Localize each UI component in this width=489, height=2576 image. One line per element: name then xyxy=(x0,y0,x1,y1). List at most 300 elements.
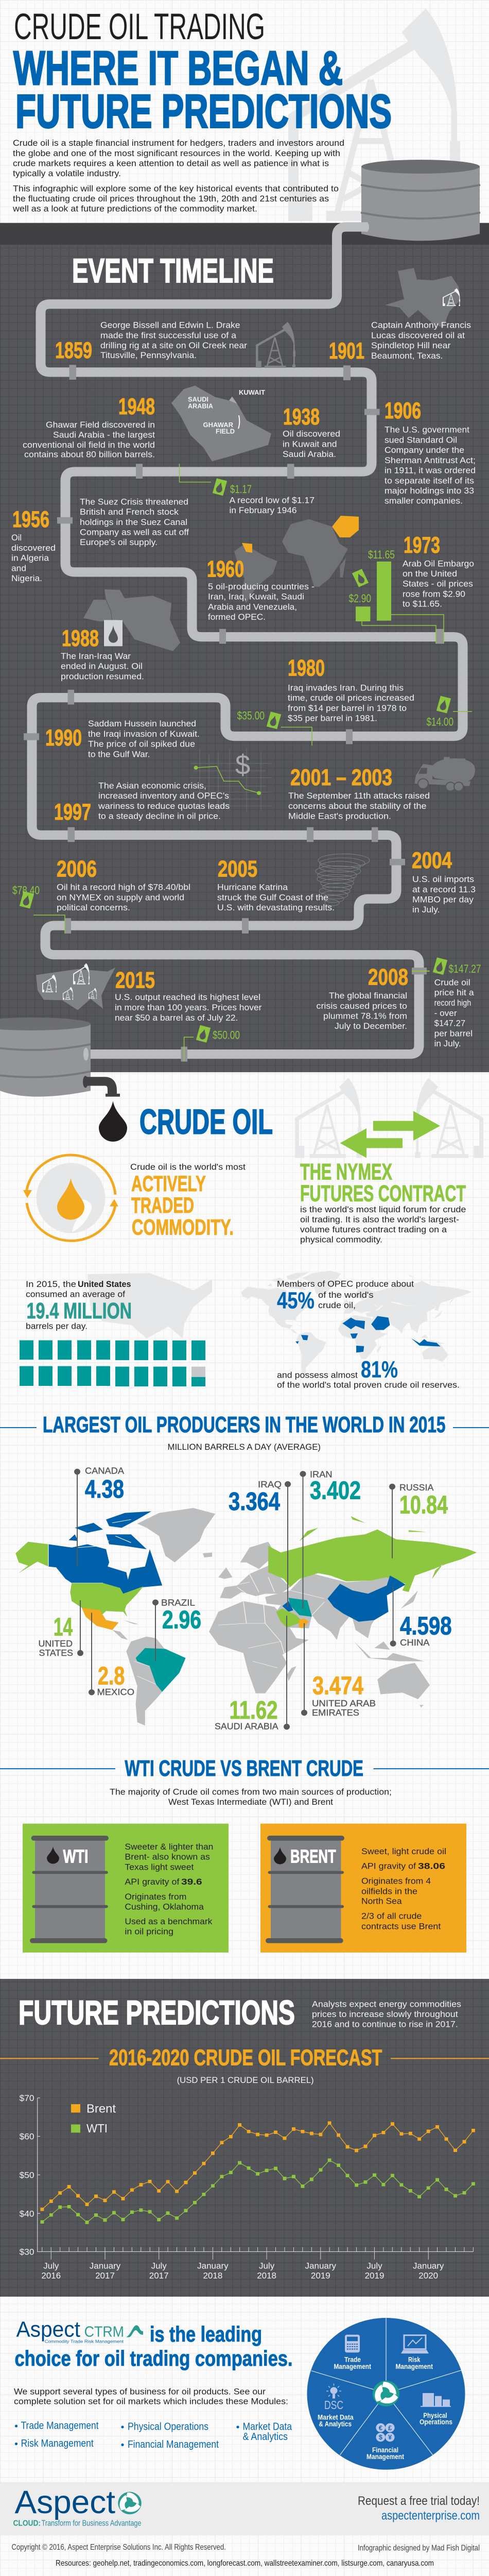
map: saudi arabia and kuwait xyxy=(171,386,271,461)
heading: leading choice: is the leading xyxy=(150,2323,262,2346)
event: 1906: in 1911, it was ordered xyxy=(385,466,476,476)
country: china xyxy=(327,1575,406,1622)
label: iran: IRAN xyxy=(310,1469,332,1479)
x-axis labels: January xyxy=(413,2261,444,2270)
x-axis labels xyxy=(41,2261,444,2280)
event: 2005: Hurricane Katrina xyxy=(217,883,288,892)
event: 1990: the Iraqi invasion of Kuwait. xyxy=(88,729,200,739)
event: 2015 with price tag: 2015 xyxy=(115,967,155,993)
label: canada: 4.38 xyxy=(85,1475,124,1503)
label: iraq: IRAQ xyxy=(258,1479,282,1489)
text block: us consumption: 19.4 MILLION xyxy=(26,1299,132,1324)
y-axis labels: $60 xyxy=(20,2132,34,2142)
callout: 2008 record high: - over xyxy=(434,1008,457,1018)
event: 1997: wariness to reduce quotas leads xyxy=(98,801,230,811)
event: 2015 with price tag: $50.00 xyxy=(213,1029,240,1041)
text block: brent facts: oilfields in the xyxy=(361,1887,417,1896)
text block: actively traded commodity xyxy=(130,1162,246,1240)
label: united arab emirates xyxy=(301,1623,376,1718)
event: 1938: Oil discovered xyxy=(283,429,340,439)
chart: dollar decline graph xyxy=(189,748,271,812)
event: 1980 with price tags: 1980 xyxy=(288,655,325,681)
heading: leading choice xyxy=(14,2323,292,2370)
x-axis labels: January xyxy=(90,2261,121,2270)
callout: 2008 record high: $147.27 xyxy=(434,1019,465,1028)
text block: opec stats: of the world's xyxy=(318,1291,373,1300)
text block: nymex futures contract xyxy=(300,1159,466,1245)
event: 2005 xyxy=(217,856,335,912)
event: 2004: in July. xyxy=(412,905,440,914)
label: mexico xyxy=(89,1613,134,1697)
x-axis labels: 2018 xyxy=(257,2271,276,2280)
text block: nymex futures contract: volume futures contract trading on a xyxy=(300,1225,447,1234)
text block: brent facts: North Sea xyxy=(361,1896,402,1906)
text block: introduction: the globe and one of the most significant resources in the world. Keeping up with xyxy=(13,148,340,158)
text block: brent facts xyxy=(361,1846,446,1931)
text block: opec stats: and possess almost xyxy=(277,1370,358,1380)
y-axis labels: $30 xyxy=(20,2247,34,2257)
text block: introduction: Crude oil is a staple financial instrument for hedgers, traders and investors around xyxy=(13,138,344,148)
event: 2015 with price tag: U.S. output reached its highest level xyxy=(115,992,260,1002)
text block: suez crisis: Company as well as cut off xyxy=(80,528,189,537)
label: russia: RUSSIA xyxy=(399,1482,434,1493)
series: brent xyxy=(42,2123,473,2209)
legend: Brent xyxy=(86,2102,116,2115)
icon: building xyxy=(421,2393,451,2407)
title line: crude oil trading: CRUDE OIL TRADING xyxy=(14,6,265,47)
chart: barrel pictogram xyxy=(20,1340,205,1386)
event: 1859: George Bissell and Edwin L. Drake xyxy=(100,320,240,330)
event: 1990: The price of oil spiked due xyxy=(88,739,195,749)
list: modules: & Analytics xyxy=(242,2431,288,2443)
event: 2004: MMBO per day xyxy=(412,895,474,904)
text block: brent facts: Sweet, light crude oil xyxy=(361,1846,446,1856)
label: canada xyxy=(74,1466,124,1566)
icon: hurricane xyxy=(316,854,370,906)
x-axis labels: 2018 xyxy=(203,2271,222,2280)
callout: 1946 record low: in February 1946 xyxy=(230,505,297,515)
text block: analysts expect xyxy=(312,1999,461,2029)
text block: introduction: well as a look at future predictions of the commodity market. xyxy=(12,204,257,214)
event: 1906 xyxy=(385,398,476,505)
event: 1997: increased inventory and OPEC's xyxy=(98,791,229,801)
text block: brent facts: Originates from 4 xyxy=(361,1876,431,1886)
pipeline xyxy=(24,222,463,1061)
heading: forecast: 2016-2020 CRUDE OIL FORECAST xyxy=(109,2045,382,2070)
country: mexico xyxy=(82,1608,118,1630)
event: 1906: Sherman Antitrust Act; xyxy=(385,455,476,465)
icon: texas map xyxy=(385,268,460,328)
icon: wti barrel xyxy=(30,1836,109,1943)
list: modules xyxy=(15,2420,292,2450)
heading: leading choice: choice for oil trading companies. xyxy=(14,2347,292,2370)
event: 1948 xyxy=(23,394,155,460)
wheel labels: Management xyxy=(395,2363,433,2370)
text block: opec stats: of the world's total proven crude oil reserves. xyxy=(277,1380,460,1389)
logo: aspect ctrm: CTRM xyxy=(84,2324,124,2340)
label: saudi arabia: SAUDI ARABIA xyxy=(215,1721,278,1732)
icon: oil drop xyxy=(99,1101,127,1142)
map: opec members africa and south america xyxy=(234,516,359,603)
panel: brent card xyxy=(260,1824,466,1953)
text block: wti facts: 39.6 xyxy=(181,1877,202,1887)
x-axis labels: 2017 xyxy=(149,2271,169,2280)
event: 2005: struck the Gulf Coast of the xyxy=(217,893,328,902)
callout: 2008 record high: Crude oil xyxy=(434,978,470,987)
event: 1906: to separate itself of its xyxy=(385,476,474,485)
label: united states: STATES xyxy=(39,1648,73,1658)
logo: aspect ctrm: Aspect xyxy=(16,2317,80,2342)
map: saudi arabia and kuwait: GHAWAR xyxy=(203,421,233,429)
icon: barrel 1988 xyxy=(104,620,123,646)
event: 2006 with price tag: Oil hit a record high of $78.40/bbl xyxy=(57,883,190,892)
icon: calculator xyxy=(345,2335,360,2352)
country: united states xyxy=(15,1542,144,1617)
panel: wti card xyxy=(23,1824,229,1953)
text block: opec stats: Members of OPEC produce about xyxy=(277,1279,414,1289)
text block: wti facts: Texas light sweet xyxy=(125,1862,194,1872)
x-axis labels: July xyxy=(259,2261,275,2270)
event: 2008: 2008 xyxy=(368,964,408,990)
text block: opec stats: 81% xyxy=(361,1356,398,1382)
y-axis labels: $50 xyxy=(20,2171,34,2180)
map: saudi arabia and kuwait: FIELD xyxy=(216,428,235,435)
icon: pumpjack 1859 xyxy=(256,322,295,368)
event: 2015 with price tag: near $50 a barrel as of July 22. xyxy=(115,1013,238,1023)
x-axis labels: July xyxy=(366,2261,382,2270)
icon: top barrel xyxy=(361,160,480,241)
label: russia: 10.84 xyxy=(399,1490,448,1519)
x-axis labels: 2016 xyxy=(41,2271,61,2280)
event: 1948: contains about 80 billion barrels. xyxy=(24,450,155,460)
event: 2008: crisis caused prices to xyxy=(316,1001,407,1011)
label: united arab emirates: 3.474 xyxy=(312,1672,363,1700)
event: 1906: sued Standard Oil xyxy=(385,435,457,445)
text block: suez crisis: Europe's oil supply. xyxy=(80,537,158,547)
event: 1859: 1859 xyxy=(55,337,92,363)
event: 1948: Saudi Arabia - the largest xyxy=(53,430,155,439)
text block: introduction: typically a volatile industry. xyxy=(13,168,121,178)
text block: us consumption: In 2015, the xyxy=(26,1279,76,1289)
x-axis labels: July xyxy=(151,2261,167,2270)
label: iran: 3.402 xyxy=(310,1476,361,1504)
title line: where it began: WHERE IT BEGAN & xyxy=(13,42,343,95)
label: russia xyxy=(389,1482,448,1558)
heading: largest oil producers: MILLION BARRELS A DAY (AVERAGE) xyxy=(168,1442,321,1452)
x-axis labels: January xyxy=(305,2261,337,2270)
event: 1956: in Algeria xyxy=(11,553,49,563)
icon: brent barrel: BRENT xyxy=(290,1845,336,1867)
event: 1859: Titusville, Pennsylvania. xyxy=(100,350,197,360)
event: 1901: 1901 xyxy=(329,338,364,364)
map: saudi arabia and kuwait: SAUDI xyxy=(188,396,208,403)
panel: future predictions background xyxy=(0,1979,489,2297)
event: 2008: The global financial xyxy=(329,991,407,1001)
event: 1859: drilling rig at a site on Oil Creek near xyxy=(100,341,247,350)
legend: WTI xyxy=(86,2122,108,2135)
event: 1990: Saddam Hussein launched xyxy=(88,719,196,728)
event: 1997: 1997 xyxy=(54,799,91,825)
x-axis labels: 2020 xyxy=(418,2271,438,2280)
wheel labels: DSC xyxy=(324,2398,343,2412)
map: largest oil producers world map xyxy=(15,1508,477,1725)
map: saudi arabia and kuwait: KUWAIT xyxy=(239,388,265,396)
heading: forecast xyxy=(0,2045,489,2085)
label: iraq: 3.364 xyxy=(229,1487,280,1516)
label: brazil: 2.96 xyxy=(162,1605,201,1634)
wheel labels: Market Data xyxy=(318,2414,354,2421)
text block: nymex futures contract: THE NYMEX xyxy=(300,1159,392,1184)
event: 1973 with bar chart xyxy=(348,532,474,644)
text block: wti facts: Cushing, Oklahoma xyxy=(125,1902,204,1911)
text block: wti facts: Used as a benchmark xyxy=(125,1917,213,1926)
icon: currency coins: $ xyxy=(379,2433,382,2441)
event: 1990: to the Gulf War. xyxy=(88,750,150,759)
icon: nymex pumpjacks and arrows xyxy=(295,1078,483,1158)
label: brazil xyxy=(152,1598,201,1661)
country: brazil xyxy=(136,1648,186,1692)
text block: suez crisis xyxy=(80,497,189,547)
event: 1906: major holdings into 33 xyxy=(385,486,474,496)
event: 1906: 1906 xyxy=(385,398,421,423)
event: 1938: 1938 xyxy=(283,404,320,430)
icon: bottom barrel with faucet xyxy=(0,1018,120,1097)
text block: analysts expect: 2016 and to continue to rise in 2017. xyxy=(312,2020,458,2029)
x-axis labels: 2017 xyxy=(95,2271,115,2280)
event: 1948: conventional oil field in the world xyxy=(23,440,155,450)
text block: wti facts: in oil pricing xyxy=(125,1927,173,1936)
text block: brent facts: 2/3 of all crude xyxy=(361,1911,422,1921)
text block: us consumption: United States xyxy=(78,1279,131,1289)
text block: wti facts: API gravity of xyxy=(125,1877,180,1887)
event: 1901: Beaumont, Texas. xyxy=(371,351,443,361)
series: wti xyxy=(42,2160,473,2223)
footer credits: Copyright © 2016, Aspect Enterprise Solutions Inc. All Rights Reserved. xyxy=(11,2543,226,2552)
text block: introduction: This infographic will explore some of the key historical events that contributed to xyxy=(13,184,339,193)
callout: 1946 record low xyxy=(179,464,315,515)
text block: us consumption xyxy=(26,1279,132,1331)
text block: us consumption: barrels per day. xyxy=(26,1321,88,1331)
heading: wti vs brent: West Texas Intermediate (WTI) and Brent xyxy=(168,1797,333,1807)
footer credits xyxy=(11,2543,480,2568)
label: iraq xyxy=(229,1479,291,1607)
callout: 2008 record high: record high xyxy=(434,998,471,1008)
event: 2001-2003: 2001 – 2003 xyxy=(290,765,392,790)
event: 1980 with price tags: $14.00 xyxy=(426,716,453,728)
text block: opec stats xyxy=(277,1279,460,1389)
event: 1901: Spindletop Hill near xyxy=(371,341,451,350)
icon: currency coins: ¥ xyxy=(388,2433,392,2441)
label: united states xyxy=(38,1600,83,1658)
heading: crude oil: CRUDE OIL xyxy=(139,1102,273,1141)
legend xyxy=(71,2102,116,2135)
list: modules: Market Data xyxy=(242,2421,292,2432)
footer credits: Resources: geohelp.net, tradingeconomics.com, longforecast.com, wallstreetexaminer.com, listsurge.com, canaryusa.com xyxy=(56,2559,434,2568)
event: 1980 with price tags: time, crude oil prices increased xyxy=(288,693,414,703)
event: 1980 with price tags: $35.00 xyxy=(237,709,265,722)
panel: footer band xyxy=(0,2482,489,2535)
text block: brent facts: 38.06 xyxy=(418,1861,445,1871)
icon: wti barrel: WTI xyxy=(63,1845,88,1867)
event: 1956: Nigeria. xyxy=(11,573,42,583)
country: saudi arabia xyxy=(276,1608,303,1628)
event: 1956: discovered xyxy=(11,543,56,553)
wheel labels: Physical xyxy=(423,2412,447,2419)
event: 2006 with price tag: 2006 xyxy=(57,856,97,882)
event: 1901: Captain Anthony Francis xyxy=(371,320,471,330)
event: 2001-2003: Middle East's production. xyxy=(288,811,391,821)
event: 1960: 5 oil-producing countries - xyxy=(208,582,315,591)
text block: wti facts: Brent- also known as xyxy=(125,1852,210,1861)
text block: opec stats: 45% xyxy=(277,1287,315,1313)
water cuts: canada xyxy=(78,1519,141,1552)
country: canada xyxy=(48,1511,162,1594)
text block: nymex futures contract: is the world's most liquid forum for crude xyxy=(300,1205,466,1214)
event: 1938 xyxy=(283,404,340,459)
text block: us consumption: consumed an average of xyxy=(26,1290,125,1299)
event: 1973 with bar chart: Arab Oil Embargo xyxy=(403,559,474,568)
event: 2001-2003: concerns about the stability of the xyxy=(288,801,426,811)
label: saudi arabia: 11.62 xyxy=(230,1696,277,1724)
text block: wti facts: Originates from xyxy=(125,1892,186,1902)
list: modules: Physical Operations xyxy=(128,2421,208,2432)
event: 1973 with bar chart: to $11.65. xyxy=(403,599,442,608)
event: 1960: formed OPEC. xyxy=(208,612,266,622)
event: 1901 xyxy=(329,320,471,364)
wheel labels: Operations xyxy=(420,2418,452,2426)
chart: module wheel xyxy=(307,2318,465,2470)
heading: largest oil producers xyxy=(0,1413,489,1452)
text block: introduction: crude markets requires a keen attention to detail as well as patience in what is xyxy=(13,159,329,168)
y-axis labels: $40 xyxy=(20,2209,34,2218)
callout: 1946 record low: A record low of $1.17 xyxy=(230,496,315,505)
event: 2008 xyxy=(316,964,408,1031)
event: 1948: 1948 xyxy=(118,394,155,419)
event: 1997 xyxy=(54,781,230,825)
event: 2006 with price tag xyxy=(12,856,190,934)
event: 1960: Arabia and Venezuela, xyxy=(208,602,297,612)
event: 1973 with bar chart: on the United xyxy=(403,569,457,579)
wheel labels: Trade xyxy=(344,2356,361,2364)
event: 2008: plummet 78.1% from xyxy=(323,1011,407,1021)
icon: brent barrel xyxy=(266,1836,344,1943)
text block: introduction: the fluctuating crude oil prices throughout the 19th, 20th and 21st centuries as xyxy=(13,194,329,204)
event: 2005: 2005 xyxy=(218,856,257,882)
text block: wti facts xyxy=(125,1842,213,1936)
heading: wti vs brent: The majority of Crude oil comes from two main sources of production; xyxy=(110,1787,392,1797)
logo: aspect cloud: CLOUD: xyxy=(13,2519,41,2528)
country borders xyxy=(48,1544,324,1684)
event: 1988: 1988 xyxy=(62,625,99,651)
event: 1973 with bar chart: rose from $2.90 xyxy=(403,589,465,599)
hub xyxy=(370,2381,399,2408)
event: 1956: and xyxy=(11,564,26,573)
event: 2006 with price tag: $78.40 xyxy=(12,884,40,896)
event: 2004: 2004 xyxy=(412,848,452,873)
event: 1980 with price tags xyxy=(237,655,472,745)
text block: support types: complete solution set for oil markets which includes these Modules: xyxy=(14,2397,288,2406)
chart axes xyxy=(38,2098,474,2260)
event: 2001-2003: The September 11th attacks raised xyxy=(288,791,430,801)
label: united states: UNITED xyxy=(38,1638,73,1649)
event: 2015 with price tag: in more than 100 years. Prices hover xyxy=(115,1003,262,1012)
text block: introduction xyxy=(12,138,344,214)
text block: brent facts: API gravity of xyxy=(361,1861,416,1871)
event: 1988: production resumed. xyxy=(61,672,144,681)
event: 1980 with price tags: $35 per barrel in 1981. xyxy=(288,714,377,723)
event: 2006 with price tag: political concerns. xyxy=(57,903,130,912)
event: 1997: to a steady decline in oil price. xyxy=(98,811,221,821)
icon: header pumpjack watermark xyxy=(288,8,460,221)
icon: currency coins xyxy=(376,2423,395,2442)
country: iran xyxy=(289,1598,312,1617)
label: mexico: 2.8 xyxy=(98,1662,125,1690)
heading: event timeline: EVENT TIMELINE xyxy=(72,252,274,290)
event: 2005: U.S. with devastating results. xyxy=(217,903,335,912)
event: 1956: Oil xyxy=(11,533,22,543)
text block: wti facts: Sweeter & lighter than xyxy=(125,1842,213,1852)
text block: nymex futures contract: oil trading. It is also the world's largest- xyxy=(300,1215,459,1224)
event: 2004: at a record 11.3 xyxy=(412,885,476,894)
country: russia xyxy=(268,1516,477,1592)
label: iran xyxy=(300,1469,361,1608)
country: uae xyxy=(299,1618,309,1629)
event: 1956 xyxy=(11,506,56,583)
callout: 2008 record high: in July. xyxy=(434,1039,461,1048)
map: us consumption watermark xyxy=(88,1273,212,1338)
icon: currency coins: € xyxy=(379,2424,382,2432)
text block: analysts expect: Analysts expect energy commodities xyxy=(312,1999,461,2009)
country: iraq xyxy=(282,1601,293,1612)
event: 1906: smaller companies. xyxy=(385,496,463,505)
x-axis labels: 2019 xyxy=(365,2271,384,2280)
icon: lamp xyxy=(326,2384,341,2398)
event: 1906: The U.S. government xyxy=(385,425,469,435)
wheel labels: Financial xyxy=(372,2446,398,2454)
label: united arab emirates: EMIRATES xyxy=(312,1707,359,1718)
event: 2006 with price tag: on NYMEX on supply and world xyxy=(57,893,184,902)
event: 1956: 1956 xyxy=(12,506,49,532)
text block: actively traded commodity: Crude oil is the world's most xyxy=(130,1162,246,1172)
wheel labels: Management xyxy=(334,2363,371,2370)
list: modules: Trade Management xyxy=(21,2420,99,2431)
x-axis labels: 2019 xyxy=(311,2271,330,2280)
label: united states: 14 xyxy=(54,1613,73,1641)
event: 1948: Ghawar Field discovered in xyxy=(46,420,155,430)
callout: 2008 record high: price hit a xyxy=(434,988,474,997)
label: canada: CANADA xyxy=(85,1466,124,1476)
event: 2008: July to December. xyxy=(335,1021,407,1031)
event: 2004 xyxy=(412,848,476,914)
text block: suez crisis: British and French stock xyxy=(80,507,179,517)
event: 1973 with bar chart: $2.90 xyxy=(348,592,371,605)
chart: dollar decline graph: $ xyxy=(235,749,250,781)
event: 1973 with bar chart: States - oil prices xyxy=(403,579,473,588)
icon: globe with oil drop xyxy=(23,1155,118,1241)
event: 1997: The Asian economic crisis, xyxy=(98,781,206,791)
label: brazil: BRAZIL xyxy=(161,1598,195,1607)
call to action xyxy=(358,2494,480,2522)
map: opec world watermark xyxy=(241,1270,471,1375)
event: 2004: U.S. oil imports xyxy=(412,874,474,884)
event: 1859 xyxy=(55,320,247,363)
logo: aspect cloud: Aspect xyxy=(14,2483,115,2520)
chart: crude oil forecast line chart xyxy=(20,2094,474,2280)
text block: suez crisis: holdings in the Suez Canal xyxy=(80,517,187,527)
text block: analysts expect: prices to increase slowly throughout xyxy=(312,2010,458,2019)
event: 1988 xyxy=(61,625,144,681)
event: 1980 with price tags: Iraq invades Iran. During this xyxy=(288,683,404,692)
